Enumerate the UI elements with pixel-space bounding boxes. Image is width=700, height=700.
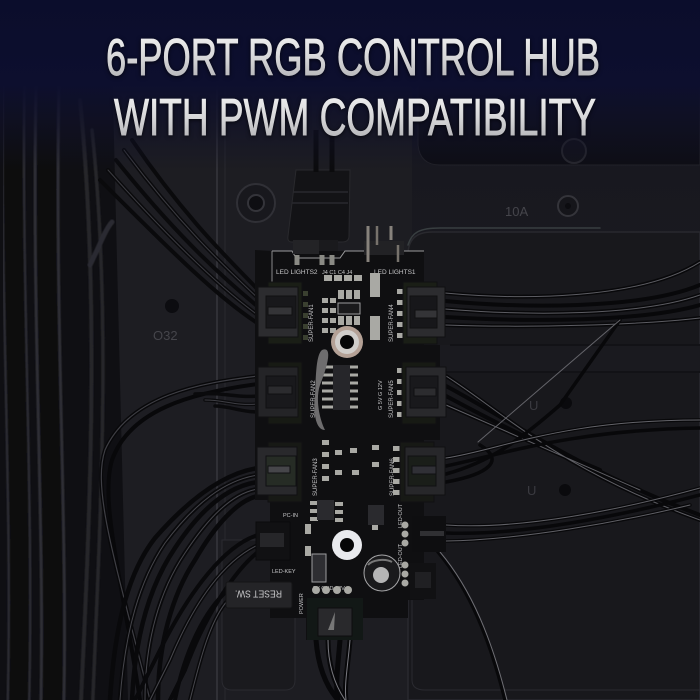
fan connectors: left	[257, 282, 302, 502]
silkscreen labels: LED-OUT	[398, 543, 404, 568]
title	[106, 29, 600, 147]
panel details: screw holes: U	[527, 483, 536, 498]
chips	[312, 303, 384, 582]
left cable bundle	[13, 60, 112, 700]
reset switch label plug: RESET SW.	[235, 587, 282, 598]
panel details: screw holes: U	[529, 398, 538, 413]
fan connectors: right	[400, 282, 446, 502]
reset switch label plug	[226, 582, 292, 608]
silkscreen labels: LED LIGHTS2	[276, 269, 318, 276]
silkscreen labels: 5V GND 12V	[313, 586, 345, 592]
small connectors: PC-IN, LED-OUT, power	[256, 516, 446, 640]
silkscreen labels: SUPER-FAN5	[389, 380, 395, 418]
control hub circuit board	[255, 226, 440, 640]
silkscreen labels: PC-IN	[283, 513, 298, 519]
panel details: screw holes: 10A	[505, 204, 528, 219]
mounting hole bottom	[332, 530, 362, 560]
header pins	[293, 226, 404, 265]
silkscreen labels: LED-KEY	[272, 569, 296, 575]
silkscreen labels: SUPER-FAN3	[313, 458, 319, 496]
solder pads	[303, 273, 408, 594]
silkscreen labels	[272, 269, 416, 614]
top RGB plug	[288, 130, 350, 258]
top navy fade	[0, 0, 700, 170]
wires: right fan bundles	[316, 228, 700, 700]
silkscreen labels: SUPER-FAN4	[389, 304, 395, 342]
panel details: screw holes	[153, 139, 586, 498]
capacitor	[364, 555, 400, 591]
silkscreen labels: LED LIGHTS1	[374, 269, 416, 276]
silkscreen labels: G 5V G 12V	[378, 380, 384, 410]
silkscreen labels: J4 C1 C4 J4	[322, 270, 352, 276]
mounting hole top	[331, 326, 363, 358]
panel details: screw holes: O32	[153, 328, 178, 343]
silkscreen labels: POWER	[299, 593, 305, 614]
silkscreen labels: SUPER-FAN6	[390, 458, 396, 496]
adhesive smudge	[314, 349, 328, 430]
silkscreen labels: LED-OUT	[398, 503, 404, 528]
wires: left fan bundles	[100, 140, 262, 700]
silkscreen labels: SUPER-FAN1	[309, 304, 315, 342]
silkscreen labels: SUPER-FAN2	[311, 380, 317, 418]
